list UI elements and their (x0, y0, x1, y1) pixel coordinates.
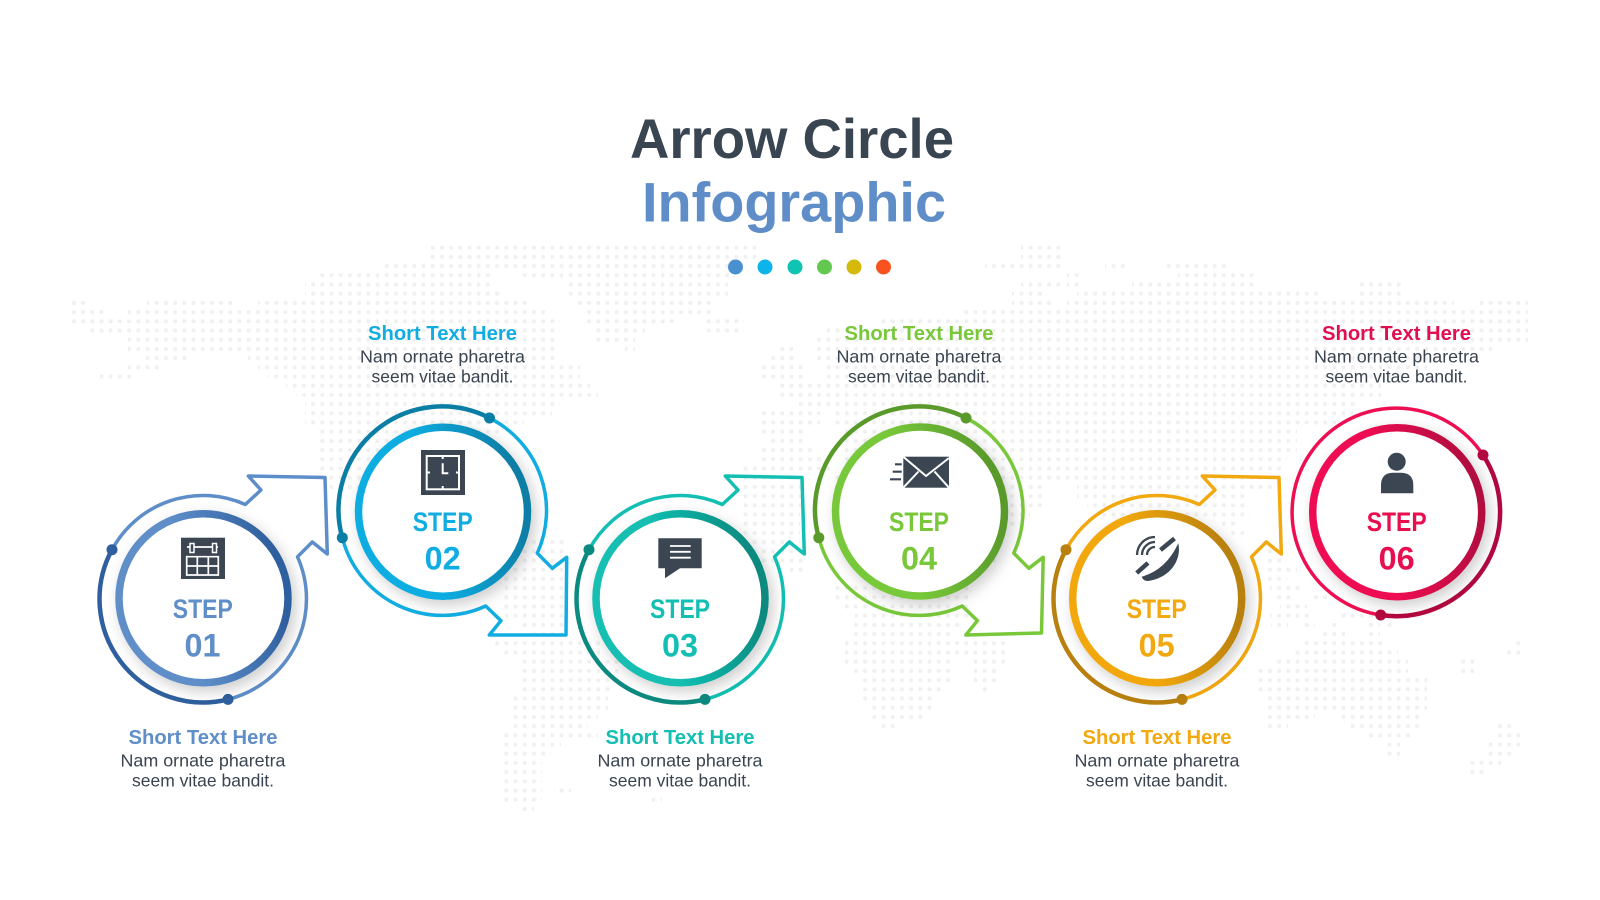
text block 06: Nam ornate pharetra (1314, 347, 1479, 367)
step 06 number: 06 (1379, 540, 1415, 576)
panel: step 04 (813, 323, 1043, 635)
text block 02: seem vitae bandit. (372, 367, 514, 387)
panel: step 02 (337, 323, 567, 635)
outer arrow ring 04 (813, 406, 1043, 635)
step 04 label: STEP (889, 507, 949, 537)
text block 05: Nam ornate pharetra (1074, 751, 1240, 771)
icon: speech bubble (658, 538, 702, 578)
panel: step 03 (577, 476, 804, 791)
text block 06: seem vitae bandit. (1326, 367, 1468, 387)
title (630, 107, 954, 234)
text block 01: Nam ornate pharetra (120, 751, 286, 771)
panel: step 05 (1054, 476, 1281, 791)
text block 01: Short Text Here (128, 727, 278, 749)
panel: step 06 (1292, 323, 1500, 620)
text block 04: seem vitae bandit. (848, 367, 990, 387)
text block 06 (1314, 323, 1479, 387)
text block 04 (836, 323, 1002, 387)
text block 02: Short Text Here (368, 323, 517, 345)
title: Arrow Circle (630, 107, 954, 170)
step 03 label: STEP (650, 594, 710, 624)
step 06 label: STEP (1367, 507, 1427, 537)
dotted world map background (72, 243, 1528, 814)
title: Infographic (642, 170, 946, 234)
step 05 label: STEP (1127, 594, 1187, 624)
icon: envelope (890, 457, 949, 488)
inner ring 01 (119, 514, 288, 683)
inner ring 03 (596, 514, 765, 683)
icon: clock (421, 450, 465, 495)
step 05 number: 05 (1139, 628, 1175, 664)
text block 03: Short Text Here (606, 727, 754, 749)
outer arrow ring 02 (337, 406, 567, 635)
text block 01 (120, 727, 286, 791)
text block 05: seem vitae bandit. (1086, 771, 1228, 791)
text block 04: Short Text Here (844, 323, 994, 345)
icon: calendar (181, 538, 225, 579)
text block 05 (1074, 727, 1240, 791)
text block 02 (360, 323, 525, 387)
outer arrow ring 01 (100, 476, 327, 705)
step 02 label: STEP (413, 507, 473, 537)
icon: person (1381, 453, 1413, 493)
panel: step 01 (100, 476, 327, 791)
inner ring 02 (358, 427, 528, 596)
inner ring 06 (1313, 428, 1482, 597)
step 02 number: 02 (425, 540, 461, 576)
text block 04: Nam ornate pharetra (836, 347, 1002, 367)
text block 05: Short Text Here (1082, 727, 1232, 749)
step 04 number: 04 (901, 540, 937, 576)
text block 02: Nam ornate pharetra (360, 347, 525, 367)
step 03 number: 03 (662, 628, 698, 664)
step 01 label: STEP (173, 594, 233, 624)
inner ring 04 (836, 427, 1004, 596)
text block 03 (598, 727, 763, 791)
inner ring 05 (1073, 514, 1242, 683)
text block 03: seem vitae bandit. (609, 771, 751, 791)
outer arrow ring 03 (577, 476, 804, 705)
text block 01: seem vitae bandit. (132, 771, 274, 791)
icon: telephone (1137, 537, 1179, 581)
outer arrow ring 05 (1054, 476, 1281, 705)
outer ring 06 (1292, 408, 1500, 620)
step 01 number: 01 (184, 628, 220, 664)
six coloured dots (728, 260, 891, 274)
text block 03: Nam ornate pharetra (598, 751, 763, 771)
text block 06: Short Text Here (1322, 323, 1471, 345)
